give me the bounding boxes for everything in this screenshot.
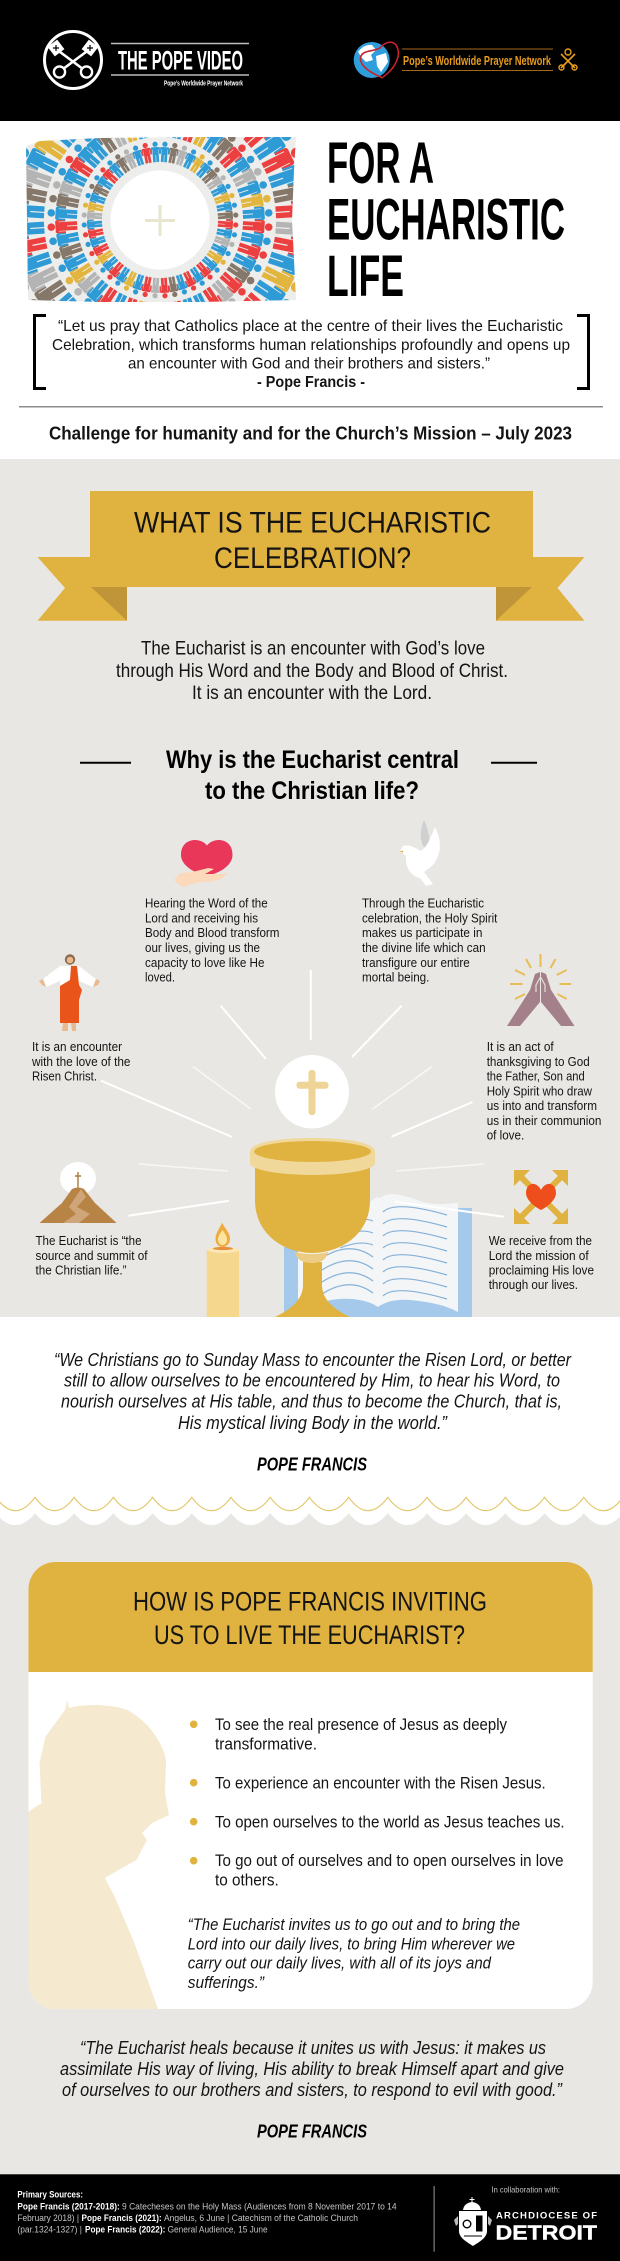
icon: chalice [250, 1138, 375, 1317]
ribbon banner: WHAT IS THE EUCHARISTIC [134, 507, 491, 540]
closing quote: assimilate His way of living, His ability to break Himself apart and give [60, 2058, 564, 2079]
text: thanksgiving: It is an act of [487, 1039, 554, 1054]
text: holy spirit: celebration, the Holy Spirit [362, 910, 498, 926]
definition text: through His Word and the Body and Blood of Christ. [116, 660, 508, 682]
text: thanksgiving: us into and transform [487, 1098, 597, 1113]
primary sources: 9 Catecheses on the Holy Mass (Audiences from 8 November 2017 to 14 [122, 2201, 397, 2211]
logo: The Pope Video: THE POPE VIDEO [118, 46, 243, 76]
bullet list: To experience an encounter with the Risen Jesus. [215, 1773, 546, 1792]
primary sources: Primary Sources: [17, 2190, 83, 2200]
text: hearing the word: capacity to love like He [145, 955, 264, 970]
primary sources [17, 2190, 397, 2235]
divider [19, 406, 603, 408]
title: LIFE [327, 244, 404, 309]
text: hearing the word: Body and Blood transform [145, 925, 280, 940]
text: holy spirit [362, 896, 498, 984]
monthly intention quote with brackets: an encounter with God and their brothers and sisters.” [128, 356, 490, 372]
challenge line: Challenge for humanity and for the Church’s Mission – July 2023 [49, 422, 572, 444]
closing quote: “The Eucharist heals because it unites us with Jesus: it makes us [80, 2037, 546, 2058]
Archdiocese of Detroit logo [454, 2184, 597, 2246]
text: thanksgiving: the Father, Son and [487, 1068, 585, 1084]
text: thanksgiving [487, 1039, 601, 1142]
Archdiocese of Detroit logo: In collaboration with: [492, 2184, 560, 2194]
definition text [116, 638, 508, 704]
panel header: US TO LIVE THE EUCHARIST? [154, 1620, 465, 1650]
bullet list: transformative. [215, 1734, 317, 1753]
footer [0, 2174, 620, 2261]
bullet list: To see the real presence of Jesus as deeply [215, 1715, 507, 1734]
panel: Pope Francis quote on white: nourish ourselves at His table, and thus to become the Church, that is, [61, 1391, 562, 1412]
rays around the host [101, 970, 484, 1216]
italic quote in panel: carry out our daily lives, with all of its joys and [188, 1954, 491, 1973]
italic quote in panel [188, 1915, 520, 1992]
text: thanksgiving: us in their communion [487, 1113, 601, 1128]
text: risen Christ: Risen Christ. [32, 1068, 97, 1084]
italic quote in panel: sufferings.” [188, 1973, 265, 1992]
monthly intention quote with brackets: - Pope Francis - [257, 374, 365, 391]
text: risen Christ: with the love of the [31, 1054, 130, 1069]
bullet list: to others. [215, 1870, 279, 1889]
header bar [0, 0, 620, 121]
primary sources: Pope Francis (2017-2018): [17, 2201, 120, 2211]
mosaic of people around a host [26, 137, 296, 302]
panel: how is Pope Francis inviting us [28, 1562, 593, 2009]
text: holy spirit: the divine life which can [362, 940, 486, 955]
panel: Pope Francis quote on white: POPE FRANCIS [257, 1455, 367, 1475]
text: risen Christ: It is an encounter [32, 1039, 123, 1054]
definition text: It is an encounter with the Lord. [192, 682, 432, 704]
text: source and summit: the Christian life.” [36, 1262, 126, 1278]
text: holy spirit: makes us participate in [362, 925, 482, 940]
panel header: HOW IS POPE FRANCIS INVITING [133, 1587, 487, 1617]
text: hearing the word: loved. [145, 970, 175, 984]
text: holy spirit: transfigure our entire [362, 955, 470, 970]
text: thanksgiving: thanksgiving to God [487, 1054, 590, 1069]
icon: open book [284, 1194, 472, 1317]
definition text: The Eucharist is an encounter with God’s love [141, 638, 485, 660]
primary sources: General Audience, 15 June [168, 2225, 268, 2235]
logo: Pope's Worldwide Prayer Network: Pope’s Worldwide Prayer Network [403, 53, 552, 68]
text: mission: proclaiming His love [489, 1262, 594, 1278]
text: holy spirit: Through the Eucharistic [362, 896, 484, 911]
primary sources: Pope Francis (2021): [82, 2213, 162, 2223]
ray over the book [395, 1202, 504, 1217]
icon: heart with arrows [514, 1170, 568, 1224]
closing quote [60, 2037, 564, 2141]
icon: heart in hand [174, 840, 232, 887]
text: thanksgiving: Holy Spirit who draw [487, 1083, 593, 1098]
closing quote: of ourselves to our brothers and sisters, to respond to evil with good.” [62, 2079, 563, 2100]
monthly intention quote with brackets [34, 316, 588, 391]
logo: The Pope Video [44, 32, 249, 88]
subheading [80, 746, 537, 805]
icon: risen Christ [39, 954, 100, 1031]
text: mission: We receive from the [489, 1233, 592, 1248]
icon: mountain with cross [40, 1162, 117, 1223]
text: mission [489, 1233, 594, 1292]
panel: what is the Eucharistic celebration [0, 459, 620, 1317]
logo: Pope's Worldwide Prayer Network [354, 42, 577, 78]
panel: Pope Francis quote on white [0, 1317, 620, 1497]
closing quote: POPE FRANCIS [257, 2121, 367, 2141]
title: FOR A [327, 131, 434, 196]
icon: host with cross [275, 1055, 349, 1128]
Archdiocese of Detroit logo: ARCHDIOCESE OF [496, 2211, 597, 2222]
text: thanksgiving: of love. [487, 1128, 524, 1142]
text: risen Christ [31, 1039, 130, 1084]
bullet list: To open ourselves to the world as Jesus teaches us. [215, 1812, 565, 1831]
icon: praying hands [507, 954, 574, 1026]
italic quote in panel: “The Eucharist invites us to go out and to bring the [188, 1915, 520, 1934]
text: hearing the word: our lives, giving us the [145, 940, 260, 955]
ribbon banner [38, 491, 584, 621]
subheading: Why is the Eucharist central [166, 746, 459, 774]
panel: Pope Francis quote on white: still to allow ourselves to be encountered by Him, to hear his Word, to [64, 1370, 560, 1391]
Archdiocese of Detroit logo: DETROIT [496, 2222, 597, 2244]
text: source and summit [36, 1233, 148, 1278]
primary sources: (par.1324-1327) | [17, 2225, 82, 2235]
title [327, 131, 565, 309]
monthly intention quote with brackets: “Let us pray that Catholics place at the centre of their lives the Eucharistic [58, 318, 563, 335]
italic quote in panel: Lord into our daily lives, to bring Him wherever we [188, 1934, 515, 1953]
monthly intention quote with brackets: Celebration, which transforms human relationships profoundly and opens up [52, 337, 570, 354]
primary sources: February 2018) | [17, 2213, 79, 2223]
primary sources: Angelus, 6 June | Catechism of the Catholic Church [164, 2213, 358, 2223]
text: source and summit: The Eucharist is “the [36, 1233, 142, 1248]
panel: Pope Francis quote on white: His mystical living Body in the world.” [178, 1412, 448, 1433]
text: mission: through our lives. [489, 1277, 578, 1292]
panel header [28, 1562, 593, 1672]
text: hearing the word: Lord and receiving his [145, 910, 258, 926]
silhouette of Pope Francis [28, 1700, 169, 2009]
icon: candle [207, 1223, 239, 1317]
text: holy spirit: mortal being. [362, 970, 429, 984]
bullet list [190, 1715, 565, 1889]
ribbon banner: CELEBRATION? [214, 542, 411, 575]
text: hearing the word [145, 896, 280, 984]
text: mission: Lord the mission of [489, 1248, 589, 1263]
scalloped divider [0, 1497, 620, 2180]
text: hearing the word: Hearing the Word of the [145, 896, 268, 911]
bullet list: To go out of ourselves and to open ourselves in love [215, 1851, 564, 1870]
icon: dove [400, 820, 440, 886]
text: source and summit: source and summit of [36, 1248, 148, 1263]
primary sources: Pope Francis (2022): [85, 2225, 165, 2235]
logo: The Pope Video: Pope’s Worldwide Prayer Network [164, 81, 243, 88]
subheading: to the Christian life? [205, 777, 419, 805]
